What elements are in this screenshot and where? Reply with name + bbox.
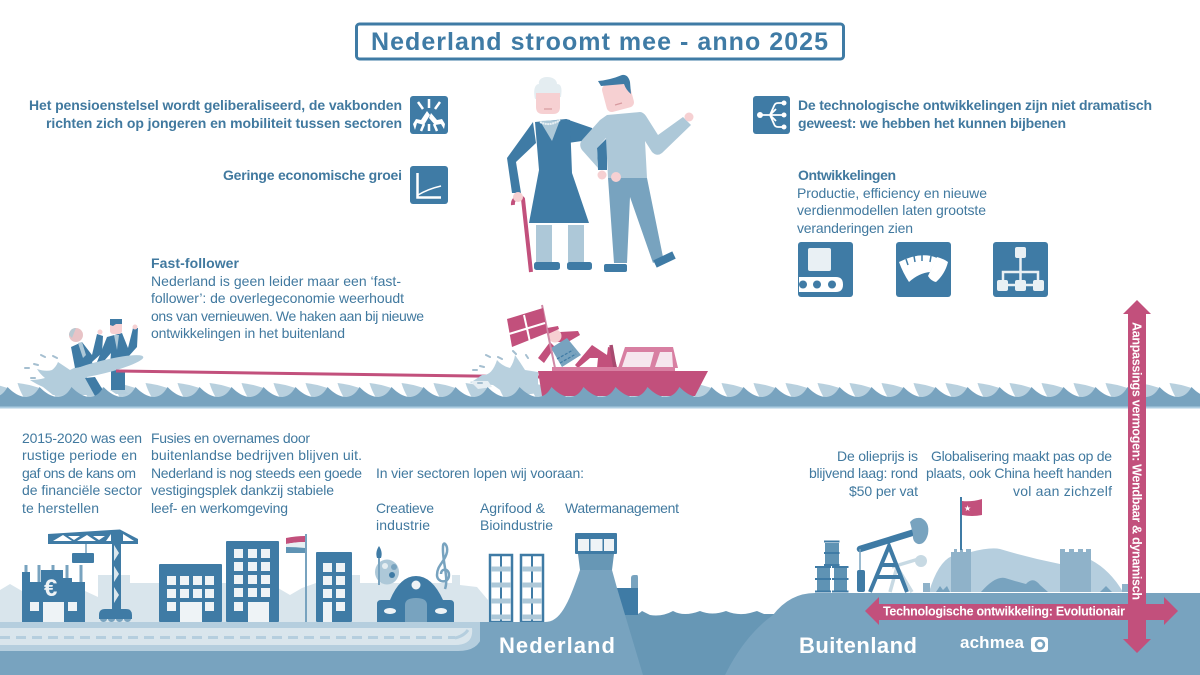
boat: [507, 305, 708, 396]
creative industry: [375, 544, 454, 622]
text block: fusies en overnames: Fusies en overnames door: [151, 430, 310, 446]
text: sectoren intro: In vier sectoren lopen wij vooraan:: [376, 465, 584, 481]
building: office tower: [226, 541, 279, 622]
icon: treble clef: [437, 544, 449, 589]
tow rope: [116, 371, 540, 377]
text: creatieve industrie: [376, 500, 434, 533]
arrow: aanpassingsvermogen: Aanpassings vermogen: Wendbaar & dynamisch: [1130, 322, 1144, 600]
chinese flag: ★: [964, 504, 971, 513]
text: creatieve industrie: Creatieve: [376, 500, 434, 516]
text block: fusies en overnames: [151, 430, 362, 516]
greenhouses agrifood: [490, 555, 543, 622]
text: creatieve industrie: industrie: [376, 517, 430, 533]
text block: 2015-2020: gaf ons de kans om: [22, 465, 136, 481]
illustration: elderly couple: [507, 75, 694, 272]
flag: [507, 305, 555, 368]
text block: fast-follower: Nederland is geen leider maar een ‘fast-: [151, 273, 401, 289]
text block: ontwikkelingen: [797, 167, 987, 236]
text: geringe economische groei: Geringe economische groei: [223, 167, 402, 183]
building: office low: [159, 564, 222, 622]
text: agrifood: Agrifood &: [480, 500, 546, 516]
text block: technologische ontwikkelingen: [798, 97, 1152, 131]
icon: concert hall: [377, 576, 454, 622]
text block: pensioenstelsel: richten zich op jongeren en mobiliteit tussen sectoren: [46, 115, 402, 131]
text block: 2015-2020: 2015-2020 was een: [22, 430, 142, 446]
surfers with splash: [25, 319, 145, 396]
text block: pensioenstelsel: Het pensioenstelsel wordt geliberaliseerd, de vakbonden: [29, 97, 402, 113]
great wall: [923, 548, 1128, 592]
text block: ontwikkelingen: veranderingen zien: [797, 220, 913, 236]
building: narrow: [316, 552, 352, 622]
text block: 2015-2020: te herstellen: [22, 500, 99, 516]
text block: fast-follower: Fast-follower: [151, 255, 240, 271]
text: agrifood: [480, 500, 553, 533]
title: Nederland stroomt mee - anno 2025: [371, 28, 828, 56]
text: olieprijs: De olieprijs is: [837, 448, 918, 464]
man: [580, 75, 694, 272]
water: [620, 611, 780, 675]
front surfer: [95, 319, 138, 394]
arrow: technologische ontwikkeling: [865, 597, 1178, 625]
waves: back crests: [0, 380, 1200, 400]
icon: growth chart: [410, 166, 448, 204]
text block: fusies en overnames: leef- en werkomgeving: [151, 500, 288, 516]
oil barrels: [815, 542, 848, 592]
text block: fast-follower: [151, 255, 424, 341]
icon: conveyor: [798, 242, 853, 297]
building: bank with euro: [22, 565, 85, 622]
chinese flag: [960, 497, 982, 550]
dutch flag: [286, 534, 307, 622]
text block: fusies en overnames: buitenlandse bedrijven blijven uit.: [151, 447, 362, 463]
text: olieprijs: blijvend laag: rond: [809, 465, 918, 481]
hull: [538, 371, 708, 396]
text block: fast-follower: ontwikkelingen in het buitenland: [151, 325, 345, 341]
text block: 2015-2020: de financiële sector: [22, 482, 142, 498]
text: globalisering: Globalisering maakt pas op de: [931, 448, 1112, 464]
text block: technologische ontwikkelingen: geweest: we hebben het kunnen bijbenen: [798, 115, 1066, 131]
text: watermanagement: Watermanagement: [565, 500, 679, 516]
icon: technology branches: [753, 96, 790, 134]
ground and road: [0, 622, 1200, 675]
waves: front water: [0, 380, 1200, 408]
arrow: technologische ontwikkeling: Technologische ontwikkeling: Evolutionair: [883, 604, 1125, 618]
oil pump background: [890, 555, 927, 592]
text: globalisering: vol aan zichzelf: [1013, 483, 1112, 499]
text block: fusies en overnames: Nederland is nog steeds een goede: [151, 465, 362, 481]
captain: [538, 326, 617, 368]
text block: ontwikkelingen: verdienmodellen laten grootste: [797, 202, 986, 218]
pump building in the water: [617, 575, 638, 615]
back surfer: [69, 328, 104, 396]
text: olieprijs: [809, 448, 918, 499]
woman: [507, 77, 607, 272]
land: buitenland: [725, 593, 1200, 675]
text block: ontwikkelingen: Productie, efficiency en nieuwe: [797, 185, 987, 201]
icon: breaking chain: [410, 96, 448, 134]
boat splash: [470, 351, 538, 397]
text: agrifood: Bioindustrie: [480, 517, 553, 533]
text block: 2015-2020: rustige periode en: [22, 447, 137, 463]
text block: pensioenstelsel: [29, 97, 402, 131]
arrow: aanpassingsvermogen: [1123, 300, 1151, 653]
logo: achmea: achmea: [960, 633, 1025, 652]
text block: fast-follower: follower’: de overlegeconomie weerhoudt: [151, 290, 404, 306]
water tower and dike: [480, 533, 643, 675]
oil pump: [857, 518, 928, 592]
skyline background: [0, 575, 488, 622]
cabin: [552, 347, 678, 371]
icon: organisation chart: [993, 242, 1048, 297]
crane: [48, 530, 138, 622]
text: globalisering: [926, 448, 1112, 499]
icon: efficiency gauge: [896, 242, 951, 297]
text block: ontwikkelingen: Ontwikkelingen: [798, 167, 896, 183]
text block: fast-follower: ons van vernieuwen. We haken aan bij nieuwe: [151, 308, 424, 324]
text: globalisering: plaats, ook China heeft handen: [926, 465, 1112, 481]
surfboard: [61, 351, 145, 383]
text block: 2015-2020: [22, 430, 142, 516]
icon: palette and brush: [375, 546, 399, 585]
building: bank with euro: €: [44, 575, 57, 602]
text block: technologische ontwikkelingen: De technologische ontwikkelingen zijn niet dramatisch: [798, 97, 1152, 113]
label: Buitenland: Buitenland: [799, 633, 917, 658]
text block: fusies en overnames: vestigingsplek dankzij stabiele: [151, 482, 334, 498]
label: Nederland: Nederland: [499, 633, 615, 658]
text: olieprijs: $50 per vat: [849, 483, 918, 499]
